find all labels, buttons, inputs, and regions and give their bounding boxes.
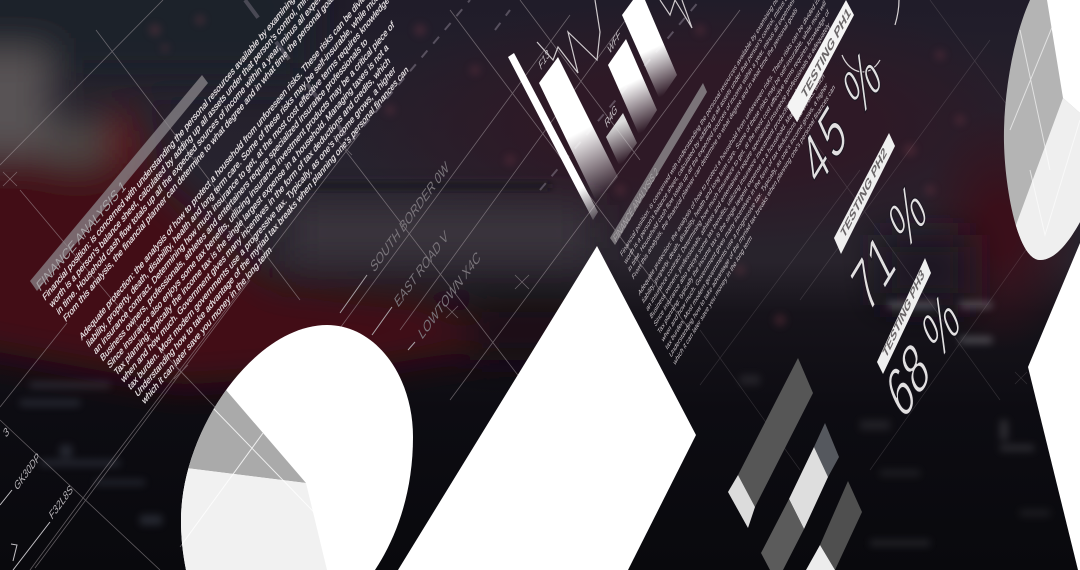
text block: personal finance notes 1: tax burden. Most modern governments use a progressive tax. Typically, as one's income grows, a higher — [127, 64, 397, 392]
text block: personal finance notes 2: tax burden. Most modern governments use a progressive tax. Typically, as one's income grows, a higher — [665, 81, 829, 352]
icon: parallelogram cluster — [728, 358, 862, 570]
location labels — [340, 157, 482, 350]
white panel right edge — [1028, 243, 1080, 570]
code labels bottom left: 3 — [2, 425, 11, 441]
text block: personal finance notes 2 — [618, 0, 859, 368]
location labels: LOWTOWN X4C — [416, 247, 482, 343]
text block: personal finance notes 1: Since insurance also enjoys some tax benefits, utilizing insurance investment products may be a critical piece of — [106, 19, 396, 371]
code labels bottom left: GK30DP — [13, 451, 42, 494]
heading bar: finance analysis 1 — [30, 75, 208, 295]
code labels bottom left — [0, 425, 75, 570]
white diamond panel — [398, 246, 696, 570]
text block: personal finance notes 2: Since insurance also enjoys some tax benefits, utilizing insurance investment products may be a critical piece of — [653, 39, 829, 329]
text block: personal finance notes 2: liability, property, death, disability, health and long term care. Some of these risks may be self-insurable, while most will — [642, 0, 827, 306]
stat: testing phase 3: 68 % — [878, 275, 968, 435]
faint right-hand grid lines — [700, 0, 1040, 470]
text block: personal finance notes 2: in time. Household cash flow totals up all the expected sources of income within a year, minus all expenses — [627, 0, 796, 274]
bar chart labels: R4G — [603, 103, 619, 131]
stat: testing phase 2: 71 % — [843, 165, 935, 328]
dashed guide lines — [245, 0, 700, 190]
stat: testing phase 1: TESTING PH1 — [800, 4, 852, 103]
bar chart labels: F13 — [537, 48, 552, 73]
text block: personal finance notes 2: Adequate protection: the analysis of how to protect a household from unforeseen risks. These risks can be divided into — [638, 0, 823, 298]
text block: personal finance notes 2: Business owners, professionals, athletes and entertainers require specialized insurance professionals to adequately — [649, 21, 831, 321]
location labels: EAST ROAD V — [392, 226, 450, 311]
text block: personal finance notes 2: which it can later save you money in the long term — [672, 234, 753, 368]
icon: bar chart — [508, 0, 677, 220]
pie chart right — [1000, 0, 1080, 270]
stat: testing phase 1: 45 % — [793, 29, 892, 202]
text block: personal finance notes 2: Understanding how to take advantage of the myriad tax breaks when planning one's personal finances can — [669, 83, 836, 360]
text block: personal finance notes 1: which it can later save you money in the long term — [140, 244, 273, 407]
text block: personal finance notes 1: Tax planning: typically the income tax is the single largest expense in a household. Managing taxes is not a — [113, 42, 390, 378]
bar chart labels — [537, 28, 623, 131]
grid lines and crosses — [0, 0, 740, 570]
heading bar: finance analysis 2 — [610, 83, 707, 246]
text block: personal finance notes 2: Tax planning: typically the income tax is the single largest expense in a household. Managing taxes is not a — [657, 59, 825, 336]
line chart — [537, 0, 692, 73]
stat: testing phase 3: TESTING PH3 — [881, 265, 926, 362]
heading bar: finance analysis 1: FINANCE ANALYSIS 1 — [34, 177, 128, 295]
pie chart large — [181, 325, 413, 570]
text block: personal finance notes 1: Business owners, professionals, athletes and entertainers require specialized insurance professionals to — [99, 36, 369, 363]
heading bar: finance analysis 2: FINANCE ANALYSIS 2 — [612, 165, 660, 246]
location labels: SOUTH BORDER 0W — [368, 157, 451, 276]
code labels bottom left: F32L8S — [48, 483, 75, 523]
text block: personal finance notes 1 — [41, 0, 432, 439]
bar chart labels: WFF — [606, 28, 623, 57]
text block: personal finance notes 1: Understanding how to take advantage of the myriad tax breaks when planning one's personal finances can — [134, 64, 410, 399]
stat: testing phase 2: TESTING PH2 — [839, 143, 889, 242]
text block: personal finance notes 1: when and how much. Government gives many incentives in the form of tax deductions and credits, which — [119, 55, 392, 386]
text block: personal finance notes 2: From this analysis, the financial planner can determine to what degree and in what time the personal goals — [631, 5, 799, 282]
text block: personal finance notes 2: when and how much. Government gives many incentives in the form of tax deductions and credits, which — [660, 72, 826, 345]
text block: personal finance notes 2: an insurance contract. Determining how much insurance to get, at the most cost effective terms requires knowledge of — [645, 8, 830, 313]
decorative arc near 45 percent — [842, 0, 899, 72]
